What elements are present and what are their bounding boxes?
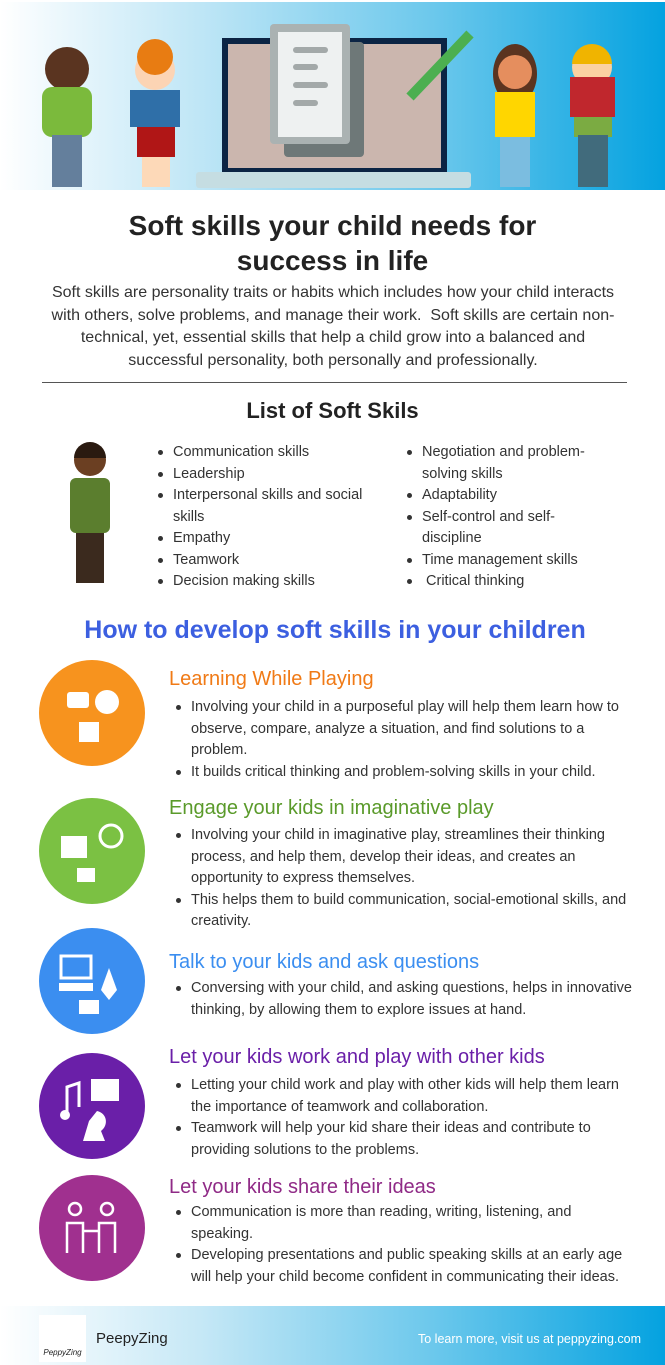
icon: magenta circle xyxy=(39,1175,145,1281)
heading: Let your kids share their ideas xyxy=(169,1176,436,1198)
panel: learning while playing: It builds critical thinking and problem-solving skills in your child. xyxy=(191,764,596,780)
list column 1: Empathy xyxy=(173,530,230,546)
panel: share ideas xyxy=(39,1175,622,1284)
list column 1 xyxy=(158,444,362,589)
intro paragraph: Soft skills are personality traits or habits which includes how your child interacts with others, solve problems, and manage their work. Soft skills are certain non-technical, yet, essential skills that help a child grow into a balanced and successful personality, both personally and professionally. xyxy=(52,284,614,368)
icon: boy left xyxy=(42,47,92,187)
logo: PeppyZing xyxy=(43,1348,82,1357)
list column 2: Time management skills xyxy=(422,552,578,568)
panel: work and play: Letting your child work and play with other kids will help them learn the importance of teamwork and collaboration. xyxy=(191,1077,619,1114)
list column 2: Critical thinking xyxy=(426,573,524,589)
icon: laptop with document xyxy=(196,24,471,188)
brand name: PeepyZing xyxy=(96,1330,168,1347)
panel: talk to kids xyxy=(39,928,632,1034)
list column 1: Leadership xyxy=(173,466,245,482)
icon: girl reading xyxy=(130,39,180,187)
list column 2: Negotiation and problem-solving skills xyxy=(422,444,585,482)
section heading: How to develop soft skills in your children xyxy=(84,616,586,644)
panel: imaginative play: This helps them to build communication, social-emotional skills, and creativity. xyxy=(191,892,626,929)
list column 2: Self-control and self-discipline xyxy=(422,508,555,546)
list column 1: Decision making skills xyxy=(173,573,315,589)
list column 2 xyxy=(407,444,585,589)
icon: girl yellow shirt xyxy=(493,44,537,187)
panel: share ideas: Developing presentations and public speaking skills at an early age will help your child become confident in communicating their ideas. xyxy=(191,1247,622,1284)
heading: Learning While Playing xyxy=(169,668,374,690)
panel: imaginative play: Involving your child in imaginative play, streamlines their thinking process, and help them, develop their ideas, and creates an opportunity to express themselves. xyxy=(191,827,605,886)
header banner xyxy=(0,2,665,190)
icon: boy with books xyxy=(570,44,615,187)
list column 1: Teamwork xyxy=(173,552,239,568)
footer link: To learn more, visit us at peppyzing.com xyxy=(418,1332,641,1346)
heading: Talk to your kids and ask questions xyxy=(169,951,479,973)
panel: work and play xyxy=(39,1046,619,1159)
footer xyxy=(0,1306,665,1365)
title xyxy=(129,210,536,276)
icon: orange circle xyxy=(39,660,145,766)
list column 1: Interpersonal skills and social skills xyxy=(173,487,362,524)
heading: Let your kids work and play with other kids xyxy=(169,1046,545,1068)
icon: blue circle xyxy=(39,928,145,1034)
panel: share ideas: Communication is more than reading, writing, listening, and speaking. xyxy=(191,1204,571,1242)
panel: learning while playing xyxy=(39,660,619,780)
icon: teacher xyxy=(70,442,110,583)
list column 2: Adaptability xyxy=(422,487,497,503)
list heading: List of Soft Skils xyxy=(246,398,419,423)
heading: Engage your kids in imaginative play xyxy=(169,797,494,819)
icon: purple circle xyxy=(39,1053,145,1159)
panel: learning while playing: Involving your child in a purposeful play will help them learn how to observe, compare, analyze a situation, and find solutions to a problem. xyxy=(191,699,619,758)
logo xyxy=(39,1315,86,1362)
panel: work and play: Teamwork will help your kid share their ideas and contribute to providing solutions to the problems. xyxy=(191,1120,591,1158)
list column 1: Communication skills xyxy=(173,444,309,460)
panel: imaginative play xyxy=(39,797,626,929)
panel: talk to kids: Conversing with your child, and asking questions, helps in innovative thinking, by allowing them to explore issues at hand. xyxy=(191,980,632,1018)
icon: green circle xyxy=(39,798,145,904)
title: success in life xyxy=(237,245,428,276)
title: Soft skills your child needs for xyxy=(129,210,536,241)
